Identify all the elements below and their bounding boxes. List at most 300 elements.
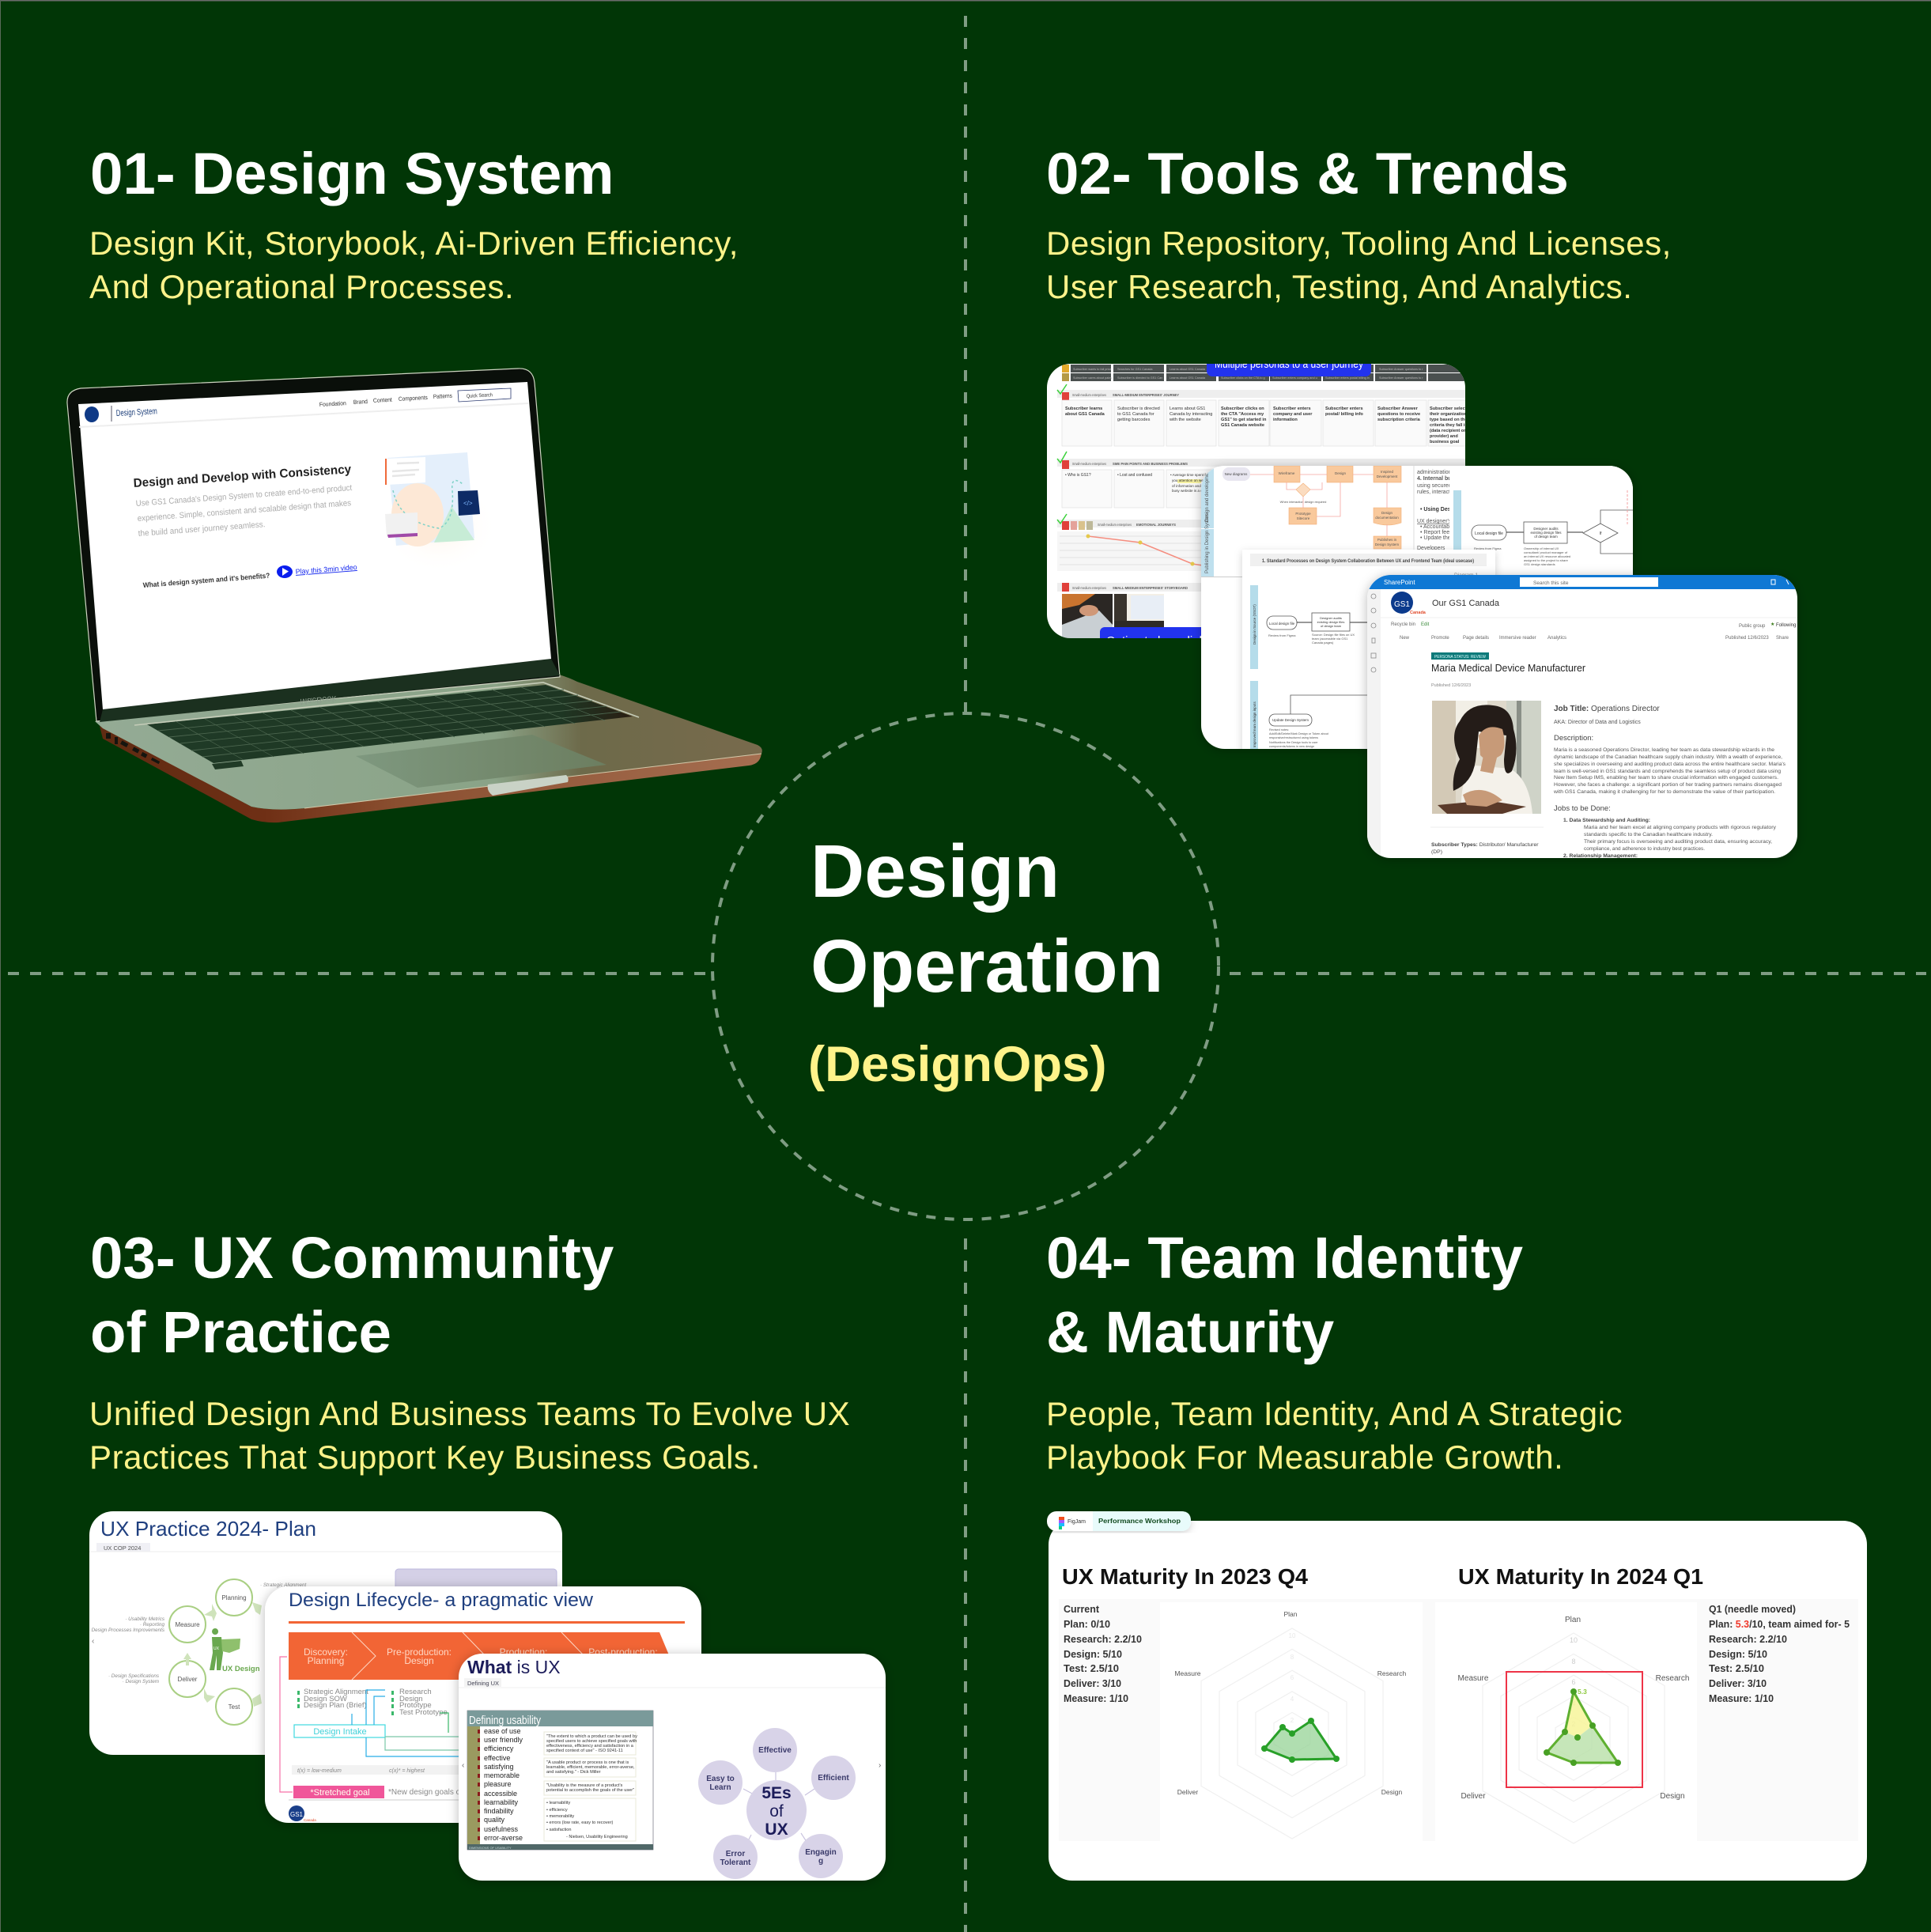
right aligned notes: · Design System (123, 1679, 159, 1684)
description 03: Practices That Support Key Business Goals. (89, 1439, 761, 1476)
scores 2023 q4: Current (1064, 1604, 1100, 1615)
5Es diagram: Easy to (706, 1775, 735, 1783)
section: journey: Subscriber is directed (1117, 406, 1160, 411)
command bars: Analytics (1547, 636, 1566, 641)
stretched goal: *Stretched goal (310, 1788, 370, 1798)
process sheet lower: existing design files (1317, 620, 1344, 624)
process lanes upper: Design System (1375, 543, 1399, 546)
center subtitle: (DesignOps) (808, 1037, 1107, 1092)
description 04: People, Team Identity, And A Strategic (1046, 1395, 1623, 1432)
defining usability slide: "The extent to which a product can be used by (546, 1734, 637, 1739)
process notes: UX designer's acc (1417, 519, 1462, 524)
persona details: Jobs to be Done: (1554, 804, 1611, 813)
section: journey: type based on the (1430, 418, 1468, 422)
cycle diagram: · Strategic Alignment (260, 1582, 306, 1588)
defining usability slide: usefulness (484, 1825, 519, 1833)
sharepoint top bar (1367, 575, 1797, 589)
radar chart 2024 q1: 10 (1570, 1636, 1578, 1644)
persona details: Their primary focus is overseeing and auditing product data, ensuring accuracy, (1584, 839, 1772, 845)
section: journey: SMALL-MEDIUM ENTERPRISES' JOURNEY (1113, 393, 1179, 397)
radar chart 2024 q1 (1458, 1616, 1689, 1843)
process notes (1417, 470, 1449, 550)
right aligned notes: · Design Specifications (108, 1673, 160, 1679)
section: pain points: Small-medium enterprises (1072, 462, 1107, 466)
section: storyboard: Small-medium enterprises (1072, 586, 1107, 590)
section: journey: Subscriber learns (1065, 406, 1102, 411)
panel 04: team identity and maturity (1046, 1225, 1867, 1881)
laptop base front edge (100, 726, 761, 822)
radar chart 2024 q1: 5.3 (1578, 1688, 1587, 1696)
process sheet lower: Local design file (1269, 622, 1295, 626)
persona tag (1431, 652, 1489, 660)
lifecycle tasks: Strategic Alignment (304, 1688, 368, 1696)
command bars: Recycle bin (1391, 622, 1415, 627)
radar chart 2023 q4: Deliver (1177, 1788, 1198, 1796)
section: journey: provider) and (1430, 434, 1458, 439)
defining usability slide: • efficiency (546, 1808, 568, 1813)
process lanes right: of design team (1534, 535, 1558, 539)
section: journey: Canada by interacting (1170, 412, 1212, 417)
play icon (277, 565, 293, 578)
process notes: • Using Design (1420, 507, 1459, 512)
scores 2024 q1: Plan: 5.3/10, team aimed for- 5 (1709, 1619, 1850, 1630)
hero paragraph: Use GS1 Canada's Design System to create end-to-end product (135, 483, 353, 509)
5Es diagram: 5Es (761, 1784, 792, 1802)
section: pain points (1057, 452, 1465, 508)
panel 03: ux community of practice (89, 1225, 886, 1881)
scores 2024 q1 (1709, 1604, 1850, 1704)
process lanes upper: Publishing in Design System (1205, 513, 1210, 573)
sharepoint top bar: SharePoint (1384, 579, 1415, 586)
section: emotional journey (1056, 514, 1201, 571)
lifecycle cost row: t(x) = low-medium (297, 1768, 342, 1774)
process lanes upper: Design (1381, 511, 1393, 515)
section: pain points: busy website is a challenge (1172, 489, 1216, 493)
process sheet lower: Add/Edit/Delete/Mark Design or Token about (1269, 732, 1329, 735)
defining usability slide: specified users to achieve specified goals with (546, 1739, 637, 1744)
lifecycle footer logo: GS1 (290, 1811, 304, 1818)
persona details: team is well-versed in GS1 standards and comprehends the seamless setup of product data using (1554, 769, 1781, 774)
site logo and name: Our GS1 Canada (1432, 599, 1500, 608)
process lanes right: assigned to the project to share (1524, 558, 1569, 562)
section: journey: business goal (1430, 440, 1460, 444)
site header (79, 388, 528, 427)
defining usability slide: quality (484, 1816, 505, 1824)
section: pain points: of information and steps (1172, 484, 1211, 488)
process lanes right: Review from Figma (1474, 546, 1502, 550)
command bars: ★ (1770, 622, 1774, 627)
scores 2024 q1: Test: 2.5/10 (1709, 1663, 1764, 1674)
lifecycle title: Design Lifecycle- a pragmatic view (289, 1590, 594, 1611)
process lanes upper: Design (1335, 471, 1346, 475)
defining usability slide: satisfying (484, 1763, 514, 1771)
process lanes right: If (1600, 531, 1602, 536)
radar chart 2023 q4: 8 (1290, 1654, 1294, 1661)
section: journey: Subscriber Answer (1377, 406, 1419, 411)
command bars: Edit (1421, 622, 1430, 627)
lifecycle tasks: Research (399, 1688, 432, 1696)
persona details: dynamic landscape of the Canadian healthcare supply chain industry. With a wealth of experience, (1554, 754, 1782, 760)
gs1 logo (85, 406, 99, 422)
navigation: Content (373, 396, 393, 404)
sheet title bar (1250, 554, 1487, 566)
section: journey: subscription criteria (1377, 418, 1421, 422)
card: what is ux (459, 1654, 886, 1881)
laptop keyboard deck (95, 675, 762, 810)
description 03 (89, 1395, 850, 1476)
section: journey: Subscriber clicks on (1221, 406, 1264, 411)
radar chart 2024 q1: Measure (1458, 1674, 1489, 1683)
process lanes right: existing design files (1530, 531, 1562, 535)
section: storyboard: SMALL-MEDIUM ENTERPRISES' STORYBOARD (1113, 586, 1188, 590)
card: sharepoint persona page: Published 12/6/2023 (1431, 683, 1471, 688)
section: pain points: SME PAIN POINTS AND BUSINESS PROBLEMS (1113, 462, 1188, 466)
top row labels: Learns about GS1 Canada (1170, 376, 1206, 380)
ux hero figure (210, 1628, 240, 1670)
description 02: Design Repository, Tooling And Licenses, (1046, 225, 1672, 262)
top row labels: Subscriber enters company and u (1272, 376, 1317, 380)
radar chart 2023 q4: Design (1381, 1788, 1402, 1796)
defining usability slide: potential to accomplish the goals of the user" (546, 1788, 634, 1793)
section: pain points: you attention on website (1172, 478, 1211, 482)
defining usability slide: - Nielsen, Usability Engineering (566, 1835, 628, 1839)
defining usability slide: • satisfaction (546, 1828, 571, 1832)
top row labels: Subscriber clicks on the CTA to g (1221, 376, 1265, 380)
heading 03 (90, 1225, 614, 1365)
process lanes upper: Prototype (1295, 512, 1311, 516)
radar chart 2023 q4 (1174, 1610, 1406, 1839)
radar chart 2024 q1: Plan (1565, 1616, 1581, 1624)
scores 2024 q1: Research: 2.2/10 (1709, 1634, 1787, 1645)
section: journey: to GS1 Canada for (1117, 412, 1154, 417)
slide tab (459, 1678, 886, 1688)
defining usability slide: • errors (low rate, easy to recover) (546, 1820, 613, 1825)
defining usability slide: ease of use (484, 1727, 521, 1735)
process notes: administration, a (1417, 470, 1457, 475)
description 03: Unified Design And Business Teams To Evolve UX (89, 1395, 850, 1432)
lifecycle cost row: c(x)* = highest (389, 1768, 425, 1774)
hero paragraph: the build and user journey seamless. (138, 520, 266, 539)
section: journey: postal/ billing info (1325, 412, 1363, 417)
section: journey: criteria they fall in (1430, 423, 1468, 428)
section: journey: Learns about GS1 (1170, 406, 1205, 411)
design intake box: Design Intake (313, 1727, 367, 1737)
defining usability slide: findability (484, 1807, 514, 1815)
top row labels: Subscriber is directed to GS1 Can (1117, 376, 1162, 380)
process notes: using secured use (1417, 483, 1462, 489)
radar chart 2023 q4: 6 (1290, 1674, 1294, 1681)
lifecycle chevrons: Design (404, 1655, 434, 1666)
radar chart 2024 q1: 8 (1571, 1658, 1576, 1665)
scores 2023 q4: Research: 2.2/10 (1064, 1634, 1142, 1645)
hero illustration (380, 452, 498, 573)
scores 2023 q4: Design: 5/10 (1064, 1649, 1122, 1660)
radar chart 2024 q1: 6 (1571, 1678, 1576, 1686)
description 01 (89, 225, 739, 305)
description 01: And Operational Processes. (89, 268, 514, 305)
ux hero figure: UX (214, 1647, 220, 1651)
command bars: Public group (1739, 624, 1766, 629)
defining usability slide: learnable, efficient, memorable, error-averse, (546, 1765, 635, 1770)
process sheet lower: Design in Source (SSOT) (1253, 604, 1256, 645)
5Es diagram (698, 1728, 856, 1879)
lifecycle chevrons: Planning (308, 1655, 344, 1666)
top row labels: Searches for GS1 Canada (1117, 368, 1153, 371)
defining usability slide: learnability (484, 1798, 519, 1806)
defining usability slide: "Usability is the measure of a product's (546, 1783, 623, 1788)
radar chart 2023 q4: 4 (1290, 1696, 1294, 1703)
sharepoint top bar: Search this site (1533, 580, 1569, 586)
lifecycle cost row (292, 1765, 459, 1775)
lifecycle tasks: Design (399, 1695, 423, 1703)
deck rim highlight (304, 754, 761, 808)
heading 01: 01- Design System (90, 141, 614, 206)
process sheet lower: Source: Design file files on UX (1312, 633, 1355, 637)
section: journey: company and user (1273, 412, 1313, 417)
radar chart 2024 q1: Research (1656, 1674, 1689, 1683)
laptop screen (78, 382, 551, 709)
scores 2023 q4: Deliver: 3/10 (1064, 1678, 1121, 1689)
slide title: What is UX (467, 1657, 561, 1677)
persona details: Subscriber Types: Distributor/ Manufacturer (1431, 842, 1539, 848)
defining usability slide: efficiency (484, 1745, 514, 1752)
process sheet lower (1242, 550, 1495, 755)
card: process flow diagram (1201, 466, 1633, 755)
hero paragraph: experience. Simple, consistent and scalable design that makes (137, 498, 351, 524)
persona details: standards specific to the Canadian healthcare industry. (1584, 832, 1713, 837)
process notes: rules, interaction (1417, 490, 1457, 495)
site logo and name (1381, 592, 1797, 618)
persona details: New Item Setup IMS, enabling her team to share crucial information with engaged customers. (1554, 775, 1778, 781)
scores 2024 q1: Design: 5/10 (1709, 1649, 1767, 1660)
persona details: with GS1 Canada, making it challenging for her to demonstrate the value of their participation. (1553, 789, 1775, 795)
process sheet lower: team (accessible via GS1 (1312, 637, 1348, 641)
navigation (319, 388, 511, 408)
persona details: she specializes in overseeing and auditing product data across the entire healthcare sector. Maria's (1554, 762, 1786, 767)
persona details: (DP) (1431, 849, 1442, 855)
section: journey (1057, 384, 1479, 446)
section: journey: information (1273, 418, 1298, 422)
radar chart 2023 q4: 2 (1290, 1717, 1294, 1724)
panel 01: design system (67, 141, 762, 822)
command bars (1391, 622, 1796, 641)
cycle diagram: Planning (221, 1594, 247, 1601)
process lanes right: Local design file (1475, 531, 1503, 536)
persona details: AKA: Director of Data and Logistics (1554, 720, 1641, 725)
scores 2023 q4: Measure: 1/10 (1064, 1693, 1128, 1704)
persona details: However, she faces a challenge: a significant portion of her trading partners remains disengaged (1554, 782, 1782, 788)
process sheet lower: Improved team design inputs (1253, 701, 1256, 747)
defining usability slide: "A usable product or process is one that is (546, 1760, 629, 1765)
process lanes right (1449, 466, 1633, 577)
persona details: 2. Relationship Management: (1563, 853, 1638, 859)
navigation: Foundation (319, 399, 346, 408)
defining usability slide: memorable (484, 1771, 520, 1779)
description 04 (1046, 1395, 1623, 1476)
site logo and name: Canada (1410, 611, 1427, 615)
defining usability slide: • memorability (546, 1814, 574, 1819)
right aligned notes (89, 1616, 165, 1684)
process lanes upper: documentation (1375, 516, 1399, 520)
lifecycle chevrons: Pre-production: (387, 1647, 452, 1658)
command bars: Published 12/6/2023 (1725, 636, 1769, 641)
defining usability slide: error-averse (484, 1834, 523, 1842)
process lanes upper: Wireframe (1279, 471, 1295, 475)
process notes: Developers (1417, 546, 1445, 551)
5Es diagram: of (769, 1802, 784, 1820)
highlight box (1506, 1672, 1642, 1787)
stretched goal: *New design goals outside (388, 1788, 482, 1797)
cycle diagram: Deliver (178, 1676, 198, 1683)
process lanes right: Designer audits (1533, 527, 1559, 531)
center title (808, 830, 1163, 1092)
defining usability slide: specified context of use" - ISO 9241-11 (546, 1749, 623, 1753)
5Es diagram: Learn (709, 1783, 731, 1792)
right aligned notes: · Usability Metrics (125, 1616, 165, 1622)
process sheet lower: Update Design System (1272, 718, 1309, 722)
right aligned notes: · Reporting (140, 1622, 164, 1628)
top row labels: Subscriber Answer questions to r (1379, 368, 1423, 371)
command bars: New (1400, 636, 1410, 641)
card: ux maturity workshop (1049, 1521, 1867, 1881)
persona details: compliance, and adherence to industry best practices. (1584, 846, 1705, 852)
figjam tab (1047, 1511, 1191, 1531)
card: sharepoint persona page (1367, 575, 1797, 859)
lavender box (395, 1569, 557, 1593)
hinge band (100, 659, 560, 722)
lifecycle tasks: Prototype (399, 1701, 432, 1710)
center heading line 2: Operation (811, 924, 1163, 1008)
5Es diagram: UX (765, 1820, 788, 1839)
card: what is ux: › (879, 1761, 881, 1770)
video link: Play this 3min video (295, 563, 357, 576)
hero heading: Design and Develop with Consistency (133, 463, 352, 490)
lifecycle tasks: Design SOW (304, 1695, 347, 1703)
lifecycle footer logo (289, 1805, 316, 1822)
laptop mockup (67, 369, 762, 822)
radar chart 2023 q4: Research (1377, 1669, 1406, 1677)
section: pain points: • Lost and confused (1117, 473, 1152, 478)
maturity titles: UX Maturity In 2023 Q4 (1062, 1564, 1308, 1589)
figjam tab: FigJam (1068, 1519, 1086, 1525)
process lanes upper: Sitecore (1297, 516, 1310, 520)
cycle diagram: UX Design (222, 1665, 260, 1673)
process notes: 4. Internal buildi (1417, 476, 1460, 482)
section: journey: questions to receive (1377, 412, 1420, 417)
process sheet lower: Diagram 1 (1454, 573, 1478, 578)
process notes: • Report feedb (1420, 530, 1456, 535)
navigation: Patterns (433, 392, 452, 400)
navigation: Components (399, 394, 428, 403)
lifecycle chevrons: Post-production: (588, 1647, 658, 1658)
top row labels: Subscriber Answer questions to r (1379, 376, 1423, 380)
process sheet lower: Notifications the Design tools to user (1269, 741, 1318, 744)
section: journey: Small-medium enterprises (1072, 393, 1107, 397)
description 02 (1046, 225, 1672, 305)
slide title: UX Practice 2024- Plan (100, 1517, 316, 1541)
section: journey: GS1 Canada website (1221, 423, 1264, 428)
section: storyboard (1057, 583, 1201, 638)
radar chart 2023 q4: Plan (1283, 1610, 1298, 1618)
center heading line 1: Design (811, 830, 1060, 913)
video prompt: What is design system and it's benefits? (142, 572, 270, 589)
scores 2024 q1: Q1 (needle moved) (1709, 1604, 1796, 1615)
slide tab (89, 1543, 562, 1552)
lifecycle chevrons (289, 1632, 679, 1680)
section: journey: Subscriber selects (1430, 406, 1469, 411)
lifecycle chevrons: Discovery: (304, 1647, 348, 1658)
process sheet lower: Designer audits (1320, 616, 1342, 620)
heading 03: 03- UX Community (90, 1225, 614, 1291)
card: what is ux: ‹ (462, 1761, 464, 1770)
cycle diagram: Measure (175, 1621, 200, 1628)
figjam tab: Performance Workshop (1098, 1518, 1181, 1525)
card: user journey map (1047, 354, 1479, 648)
command bars: Immersive reader (1499, 636, 1536, 641)
lifecycle chevrons: Production: (500, 1647, 547, 1658)
journey top rows (1071, 365, 1465, 381)
site logo and name: GS1 (1394, 600, 1410, 609)
banner: hyperlink: Option to hyperlink h (1106, 634, 1215, 648)
process notes: • Accountable (1420, 524, 1454, 530)
hero illustration: </> (463, 500, 473, 507)
defining usability slide: effectiveness, efficiency and satisfaction in a (546, 1744, 634, 1749)
slide tab: Defining UX (467, 1680, 499, 1687)
section: journey: getting barcodes (1117, 418, 1151, 422)
defining usability slide: DIMENSIONS OF USABILITY (469, 1846, 512, 1850)
process lanes right: consultant/ product manager of (1524, 550, 1568, 554)
banner: multiple personas: Multiple personas to a user journey (1215, 357, 1363, 371)
process sheet lower: Canada pages) (1312, 641, 1334, 645)
scores 2024 q1: Deliver: 3/10 (1709, 1678, 1767, 1689)
radar chart 2023 q4: 10 (1289, 1632, 1296, 1639)
maturity titles (1062, 1564, 1703, 1589)
defining usability slide: Defining usability (469, 1714, 541, 1727)
banner: hyperlink (1100, 627, 1201, 638)
navigation: Quick Search (467, 392, 493, 399)
section: pain points: • Who is GS1? (1065, 473, 1091, 478)
5Es diagram: g (818, 1857, 823, 1866)
hero paragraph (135, 483, 353, 539)
command bars: Promote (1431, 636, 1449, 641)
lifecycle tasks (304, 1688, 448, 1717)
process lanes upper: Design and development (1205, 469, 1210, 522)
stretched goal (293, 1786, 482, 1798)
persona chips (1062, 365, 1069, 381)
section: journey: Subscriber enters (1273, 406, 1311, 411)
persona title: Maria Medical Device Manufacturer (1431, 663, 1585, 674)
right aligned notes: · Design Processes Improvements (89, 1628, 165, 1633)
heading 04: 04- Team Identity (1046, 1225, 1524, 1291)
scores 2023 q4: Plan: 0/10 (1064, 1619, 1110, 1630)
lifecycle tasks: Test Prototype (399, 1708, 448, 1717)
top row labels: Subscriber wants to fall price (1073, 368, 1112, 371)
process lanes upper (1201, 466, 1415, 577)
lifecycle footer logo: Canada (304, 1818, 316, 1822)
process lanes right: Ownership of internal UX (1524, 546, 1559, 550)
process lanes upper: When interaction design required (1280, 500, 1326, 504)
front notch (488, 775, 569, 796)
5Es diagram: Engagin (805, 1848, 837, 1857)
5Es diagram: Efficient (818, 1774, 849, 1783)
top row labels: Learns about GS1 Canada (1170, 368, 1206, 371)
banner: multiple personas (1207, 364, 1371, 376)
description 02: User Research, Testing, And Analytics. (1046, 268, 1632, 305)
process lanes upper: New diagrams (1225, 472, 1248, 476)
laptop ports (106, 733, 160, 764)
keyboard (134, 682, 639, 771)
5Es diagram: Tolerant (720, 1858, 751, 1867)
